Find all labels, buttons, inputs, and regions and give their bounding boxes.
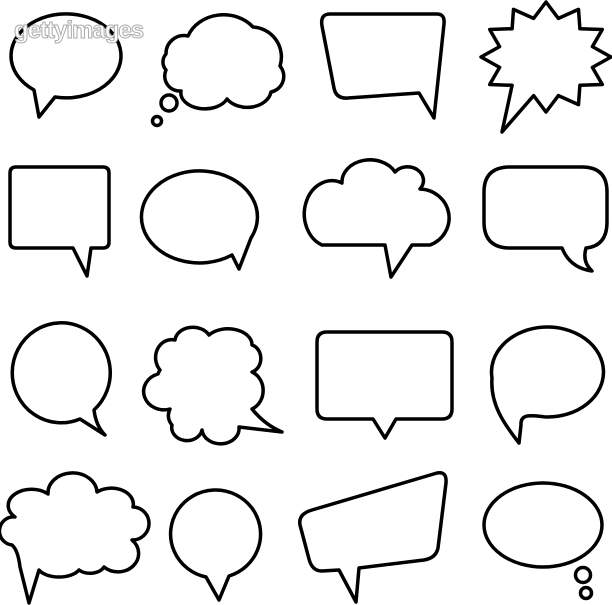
watermark: gettyimages: gettyimages [14, 17, 144, 44]
bubble 14: round bubble bottom tail [171, 490, 261, 600]
bubble 1: oval speech bubble [11, 14, 121, 117]
bubble 2: thought cloud [152, 15, 284, 125]
bubble 8: rounded rectangle bubble curled tail [484, 167, 607, 271]
bubble 12: oval bubble tail bottom-left [492, 327, 604, 443]
bubble 13: cloud bubble tail left [0, 473, 149, 603]
bubble 6: oval bubble tail right [141, 171, 257, 269]
bubble 9: round bubble [12, 323, 110, 435]
bubble 16: oval thought bubble [484, 483, 602, 598]
bubble 5: square speech bubble [10, 167, 109, 276]
bubble 4: starburst speech bubble [481, 2, 611, 132]
bubble 3: trapezoid speech bubble [322, 14, 444, 118]
bubble 10: cloud bubble pointing right [144, 327, 282, 444]
bubble 11: rectangle bubble centered tail [317, 332, 452, 438]
bubble 15: slanted quadrilateral bubble [300, 473, 446, 602]
bubble 7: cloud speech bubble [304, 160, 449, 277]
